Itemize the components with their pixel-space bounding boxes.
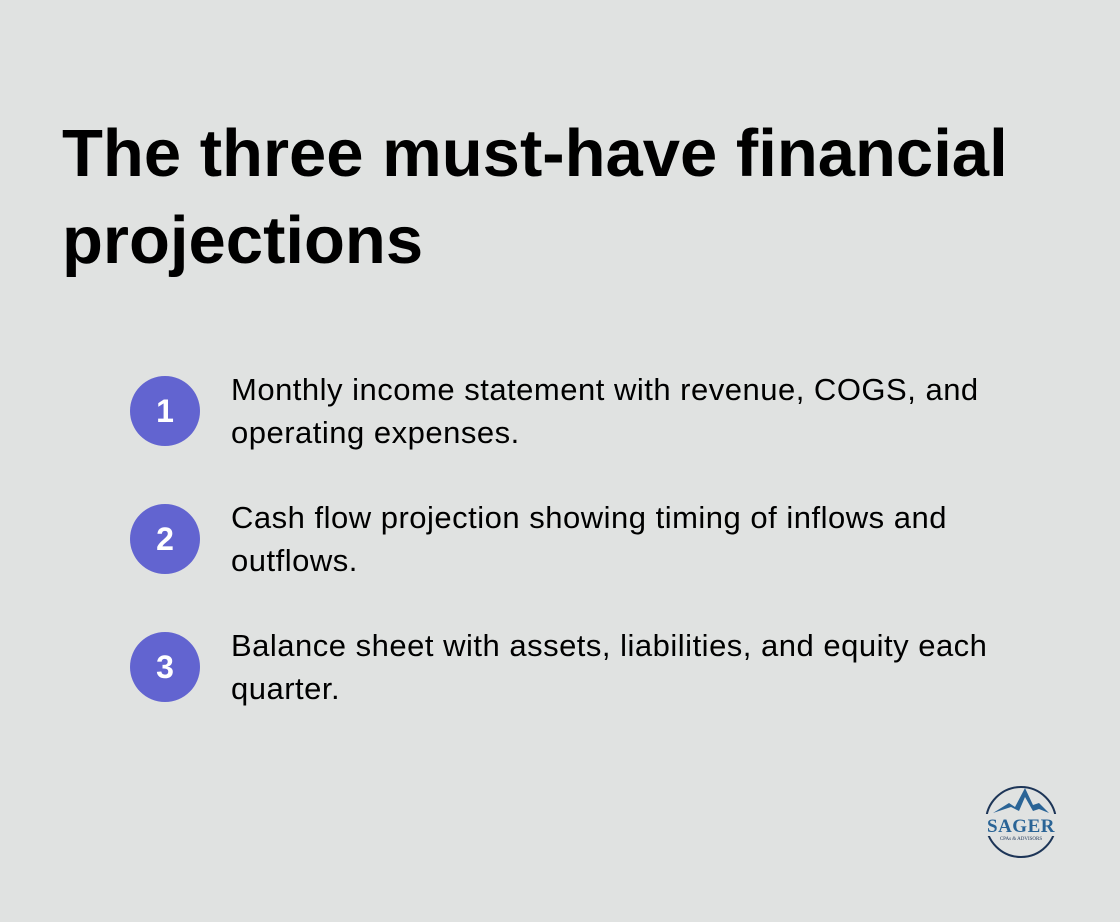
number badge 2 (130, 504, 200, 574)
text 2: Cash flow projection showing timing of inflows and outflows. (231, 500, 947, 578)
logo: Sager: CPAs & ADVISORS (1000, 837, 1042, 842)
title: The three must-have financial projections (62, 116, 1008, 278)
number badge 1 (130, 376, 200, 446)
text 3: Balance sheet with assets, liabilities, and equity each quarter. (231, 628, 987, 706)
text 1: Monthly income statement with revenue, COGS, and operating expenses. (231, 372, 979, 450)
number badge 3: 3 (156, 649, 174, 685)
logo: Sager (986, 786, 1056, 858)
item 2 (130, 500, 947, 578)
item 3 (130, 628, 987, 706)
number badge 1: 1 (156, 393, 174, 429)
logo: Sager: SAGER (987, 816, 1055, 837)
number badge 2: 2 (156, 521, 174, 557)
item 1 (130, 372, 979, 450)
number badge 3 (130, 632, 200, 702)
